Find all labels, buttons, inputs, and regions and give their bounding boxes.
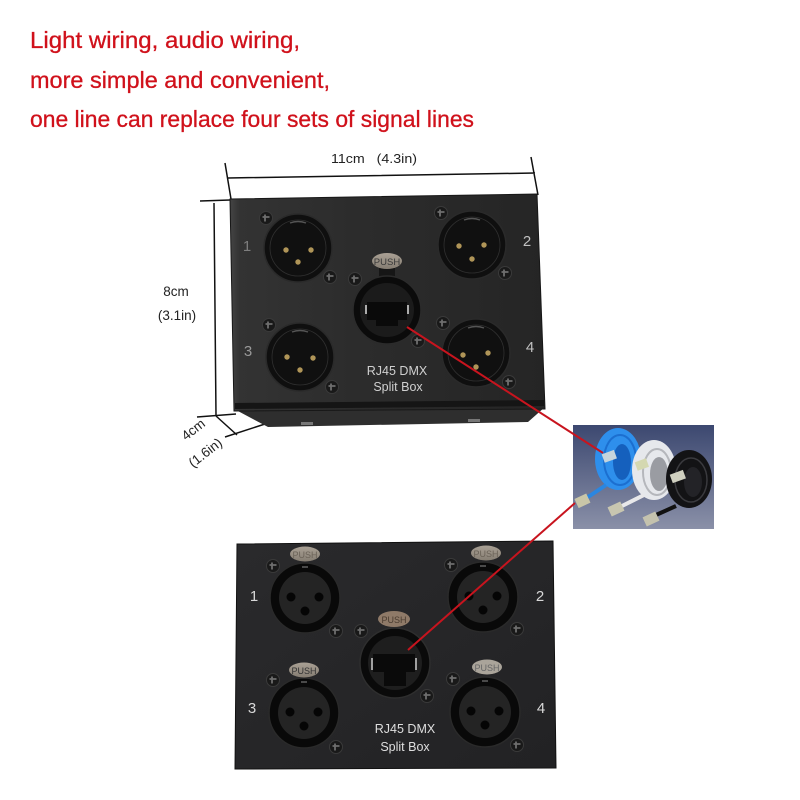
connector 2 [438,211,506,279]
RJ45 socket [360,611,430,698]
connector 1 [264,214,332,282]
black cable [643,450,712,526]
title: one line can replace four sets of signal lines [30,106,474,132]
dimension: depth 4cm: (1.6in) [186,435,225,470]
title: more simple and convenient, [30,67,330,93]
blue cable [574,428,641,508]
box label: Split Box [373,380,423,394]
port numbers: 2 [523,233,531,250]
port numbers [248,588,545,717]
RJ45 socket: PUSH [374,257,400,268]
port numbers: 4 [537,700,545,717]
bottom box: female XLR splitter [235,541,556,769]
screws [260,206,516,394]
connector 4 [442,319,510,387]
dimension: depth 4cm [179,416,265,470]
box label [367,364,428,394]
connector 2 [448,546,518,632]
port numbers: 3 [248,700,256,717]
white cable [608,440,676,516]
box label: Split Box [380,740,430,754]
RJ45 socket [353,253,421,344]
port numbers: 1 [243,238,251,255]
dimension: width 11cm: 11cm (4.3in) [331,151,417,166]
connector 3 [266,323,334,391]
port numbers: 4 [526,339,534,356]
port numbers: 2 [536,588,544,605]
photo: ethernet cables [573,425,714,529]
connector 1: PUSH [292,550,318,560]
screws [266,558,524,754]
connector 4: PUSH [474,663,500,673]
title [30,27,474,132]
connector 3 [269,662,339,748]
box body [235,541,556,769]
connector 2: PUSH [473,549,499,559]
dimension: height 8cm [158,200,236,417]
dimension: depth 4cm: 4cm [179,416,208,443]
dimension: height 8cm: 8cm [163,284,189,299]
title: Light wiring, audio wiring, [30,27,300,53]
box label [375,722,436,754]
port numbers: 1 [250,588,258,605]
box body [230,194,545,427]
arrow: bottom socket to cable [408,503,575,650]
port numbers [243,233,534,360]
connector 1 [270,546,340,633]
connector 3: PUSH [291,666,317,676]
RJ45 socket: PUSH [381,615,407,625]
port numbers: 3 [244,343,252,360]
arrow: top socket to cable [407,327,603,453]
top box: male XLR splitter [230,194,545,427]
dimension: width 11cm [225,151,538,199]
connector 4 [450,660,520,747]
box label: RJ45 DMX [375,722,436,736]
dimension: height 8cm: (3.1in) [158,308,196,323]
box label: RJ45 DMX [367,364,428,378]
